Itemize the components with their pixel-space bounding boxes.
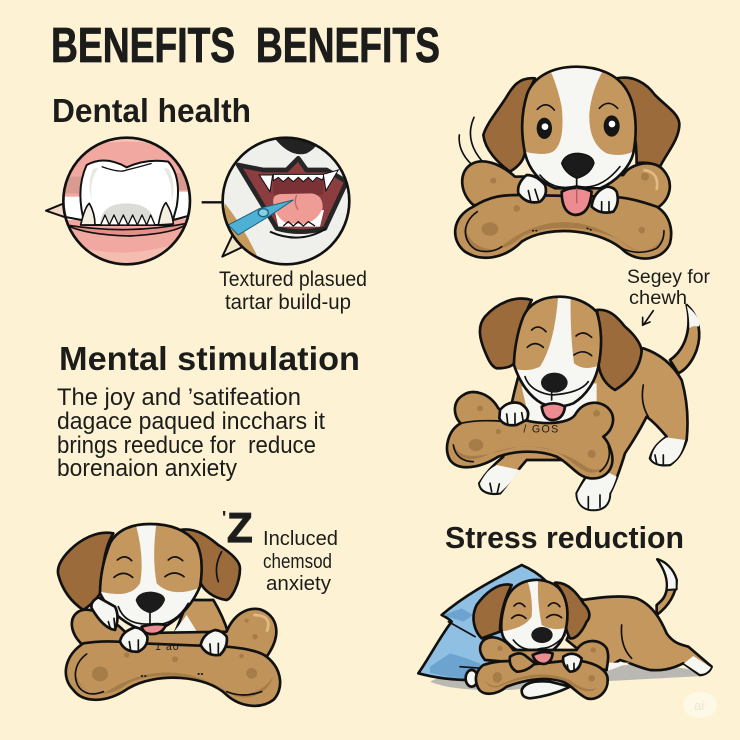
heading: stress reduction: Stress reduction [445, 520, 684, 555]
arrow [643, 311, 653, 325]
mental stimulation paragraph: brings reeduce for reduce [57, 432, 316, 459]
dental caption: tartar build-up [225, 291, 351, 314]
title: BENEFITS BENEFITS [51, 19, 440, 73]
icon: sleep Z: Z [227, 504, 253, 551]
dental caption: Textured plasued [219, 268, 367, 291]
watermark badge [683, 692, 717, 718]
label: chew note: Segey for [627, 267, 711, 288]
sleep Z tick: ' [222, 508, 226, 528]
label: chew note: chewh [629, 288, 687, 309]
heading: dental health: Dental health [52, 92, 251, 129]
illustration: sleepy puppy on bone [58, 522, 280, 706]
illustration: standing puppy with bone [447, 293, 699, 510]
icon: dog mouth circle with scraper [202, 135, 353, 268]
illustration: puppy resting on pillow [418, 559, 712, 699]
wag lines [459, 117, 492, 171]
mental stimulation paragraph: borenaion anxiety [57, 455, 237, 482]
heading: mental stimulation: Mental stimulation [59, 340, 360, 377]
mental stimulation paragraph: The joy and ’satifeation [57, 384, 301, 411]
icon: tooth circle [46, 137, 193, 270]
bone label: / GOS [523, 424, 560, 436]
watermark badge: ai [694, 698, 704, 713]
mental stimulation paragraph: dagace paqued incchars it [57, 408, 325, 435]
label: sleep note: anxiety [266, 573, 331, 595]
illustration: puppy with bone, head view [455, 67, 679, 259]
bone label: 1 ao [155, 641, 180, 653]
label: sleep note: chemsod [263, 551, 332, 573]
label: sleep note: Incluced [263, 528, 338, 550]
